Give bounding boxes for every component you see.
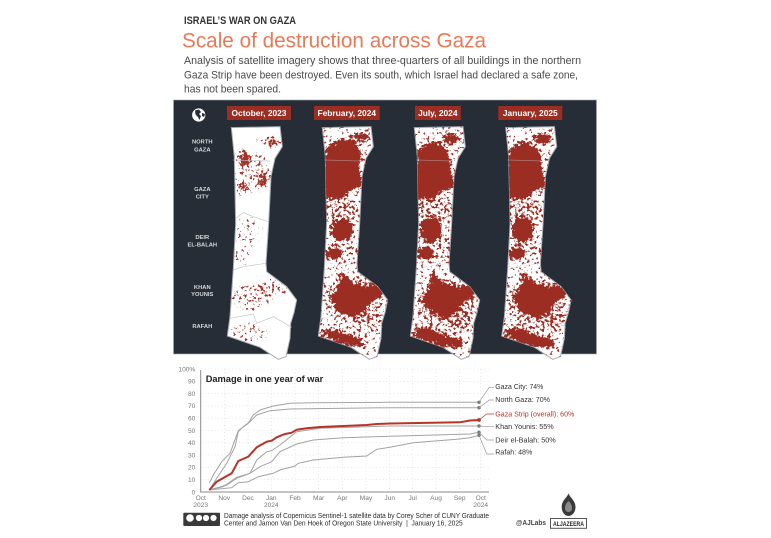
region labels [187, 140, 217, 330]
chart heading: Damage in one year of war [206, 374, 324, 385]
intro paragraph: Gaza Strip have been destroyed. Even its south, which Israel had declared a safe zone, [184, 69, 578, 81]
date label: February 2024: February, 2024 [318, 108, 376, 118]
x axis labels: Mar [313, 495, 325, 502]
x axis labels: 2024 [473, 502, 488, 509]
y axis labels: 40 [188, 440, 196, 447]
map: January 2025 [501, 127, 574, 360]
date label: January 2025 [498, 106, 562, 120]
logo: Al Jazeera flame [562, 493, 576, 516]
footer [183, 493, 587, 528]
map: July 2024 [410, 127, 483, 360]
kicker: ISRAEL’S WAR ON GAZA [184, 15, 296, 27]
line: Khan Younis [209, 426, 479, 490]
x axis labels: Jan [266, 495, 277, 502]
region labels: NORTH [192, 140, 213, 146]
x axis labels: Dec [242, 495, 255, 502]
date label: February 2024 [314, 106, 380, 120]
x axis labels: Jul [408, 495, 417, 502]
line: North Gaza [209, 408, 479, 490]
x axis labels: Oct [476, 495, 486, 502]
x axis labels: Apr [337, 495, 348, 502]
x axis labels: Feb [289, 495, 301, 502]
line: Deir el-Balah [209, 432, 479, 490]
map: February 2024 [318, 127, 391, 360]
infographic [173, 16, 597, 529]
x axis labels [193, 495, 488, 509]
intro paragraph: Analysis of satellite imagery shows that three-quarters of all buildings in the northern [184, 55, 581, 67]
region labels: RAFAH [192, 324, 212, 330]
intro paragraph: has not been spared. [184, 83, 281, 95]
region labels: KHAN [194, 285, 211, 291]
date label: October 2023: October, 2023 [232, 108, 287, 118]
axes [201, 370, 489, 492]
credit: AJLabs: @AJLabs [516, 520, 546, 527]
region labels: YOUNIS [191, 292, 214, 298]
series labels: Khan Younis: 55% [495, 422, 554, 431]
x axis labels: Sep [454, 495, 466, 502]
x axis labels: Aug [430, 495, 442, 502]
icon: creative commons licence [183, 513, 220, 526]
region labels: GAZA [194, 147, 211, 153]
panel: satellite damage maps [174, 100, 596, 360]
end-point dots [477, 401, 481, 437]
series labels: North Gaza: 70% [495, 395, 550, 404]
date label: January 2025: January, 2025 [503, 108, 558, 118]
intro paragraph [184, 55, 581, 95]
logo: Al Jazeera wordmark [550, 518, 586, 528]
series labels: Gaza Strip (overall): 60% [495, 409, 575, 418]
logo: Al Jazeera wordmark: ALJAZEERA [553, 521, 584, 528]
region labels: CITY [196, 194, 209, 200]
series labels [495, 382, 575, 457]
source text: Damage analysis of Copernicus Sentinel-1 satellite data by Corey Scher of CUNY Graduate [224, 513, 489, 520]
y axis labels: 90 [188, 379, 196, 386]
date label: July 2024: July, 2024 [418, 108, 458, 118]
y axis labels [178, 366, 196, 496]
y axis labels: 80 [188, 391, 196, 398]
source text [224, 513, 489, 527]
series labels: Gaza City: 74% [495, 382, 544, 391]
x axis labels: Nov [218, 495, 231, 502]
x axis labels: 2024 [264, 502, 279, 509]
panel background [174, 100, 596, 354]
y axis labels: 30 [188, 452, 196, 459]
title: Scale of destruction across Gaza [182, 28, 486, 52]
line chart: damage in one year of war [178, 366, 575, 509]
x axis labels: 2023 [193, 502, 208, 509]
region labels: GAZA [194, 187, 211, 193]
y axis labels: 70 [188, 403, 196, 410]
y axis labels: 50 [188, 428, 196, 435]
line: Gaza City [209, 402, 479, 483]
leader lines [479, 387, 494, 454]
y axis labels: 10 [188, 477, 196, 484]
x axis labels: May [360, 495, 373, 502]
region labels: DEIR [195, 235, 210, 241]
y axis labels: 0 [192, 489, 196, 496]
x axis labels: Jun [384, 495, 395, 502]
map: October 2023 [227, 127, 297, 359]
line: Rafah [209, 435, 479, 490]
series labels: Rafah: 48% [495, 448, 533, 457]
date label: October 2023 [227, 106, 291, 120]
line: Gaza Strip overall [209, 420, 479, 490]
series labels: Deir el-Balah: 50% [495, 435, 556, 444]
source text: Center and Jamon Van Den Hoek of Oregon State University | January 16, 2025 [224, 520, 463, 527]
icon: globe [192, 108, 205, 122]
y axis labels: 60 [188, 416, 196, 422]
y axis labels: 100% [178, 366, 195, 373]
date label: July 2024 [415, 106, 461, 120]
x axis labels: Oct [196, 495, 206, 502]
y axis labels: 20 [188, 465, 196, 472]
region labels: EL-BALAH [187, 242, 217, 248]
